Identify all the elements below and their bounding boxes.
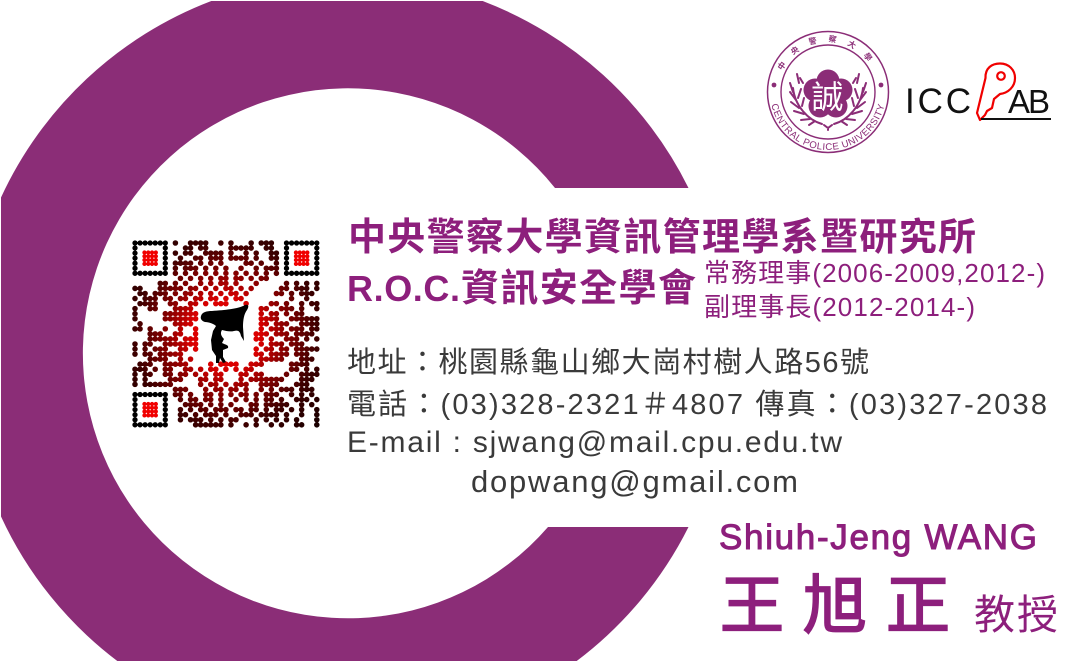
plum blossom (804, 70, 852, 118)
QR data modules (135, 243, 317, 425)
department heading: 中央警察大學資訊管理學系暨研究所 (348, 217, 976, 259)
email 1: E-mail : sjwang@mail.cpu.edu.tw (347, 426, 842, 459)
seal bottom text: CENTRAL POLICE UNIVERSITY (772, 104, 884, 150)
logo underline (981, 118, 1051, 120)
Chinese name: 王旭正 (720, 570, 950, 642)
finder rings (135, 243, 317, 425)
AB wordmark: AB (1008, 83, 1050, 120)
association role 1: 常務理事(2006-2009,2012-) (704, 258, 1045, 288)
association role 2: 副理事長(2012-2014-) (704, 292, 975, 322)
seal arc paths (770, 42, 886, 150)
purple C ring (1, 1, 688, 661)
address: 地址：桃園縣龜山鄉大崗村樹人路56號 (347, 346, 869, 379)
title: 教授 (974, 592, 1058, 638)
phone and fax: 電話：(03)328-2321＃4807 傳真：(03)327-2038 (347, 388, 1047, 421)
finder red centres (144, 252, 308, 415)
ICC wordmark: ICC (905, 82, 971, 121)
association heading: 資訊安全學會 (461, 268, 696, 310)
association heading: R.O.C. (347, 268, 460, 309)
university seal (766, 30, 890, 154)
seal character: 誠 (811, 79, 844, 115)
seal top text: 中央警察大學 (778, 35, 873, 70)
seal rings (768, 32, 888, 152)
key icon (977, 64, 1015, 120)
QR centre silhouette (201, 305, 248, 363)
QR code (135, 243, 317, 425)
laurel branches (790, 74, 866, 130)
email 2: dopwang@gmail.com (471, 464, 798, 499)
ICCLAB logo (905, 64, 1051, 121)
seal side dots (772, 83, 883, 87)
English name: Shiuh-Jeng WANG (719, 518, 1037, 557)
